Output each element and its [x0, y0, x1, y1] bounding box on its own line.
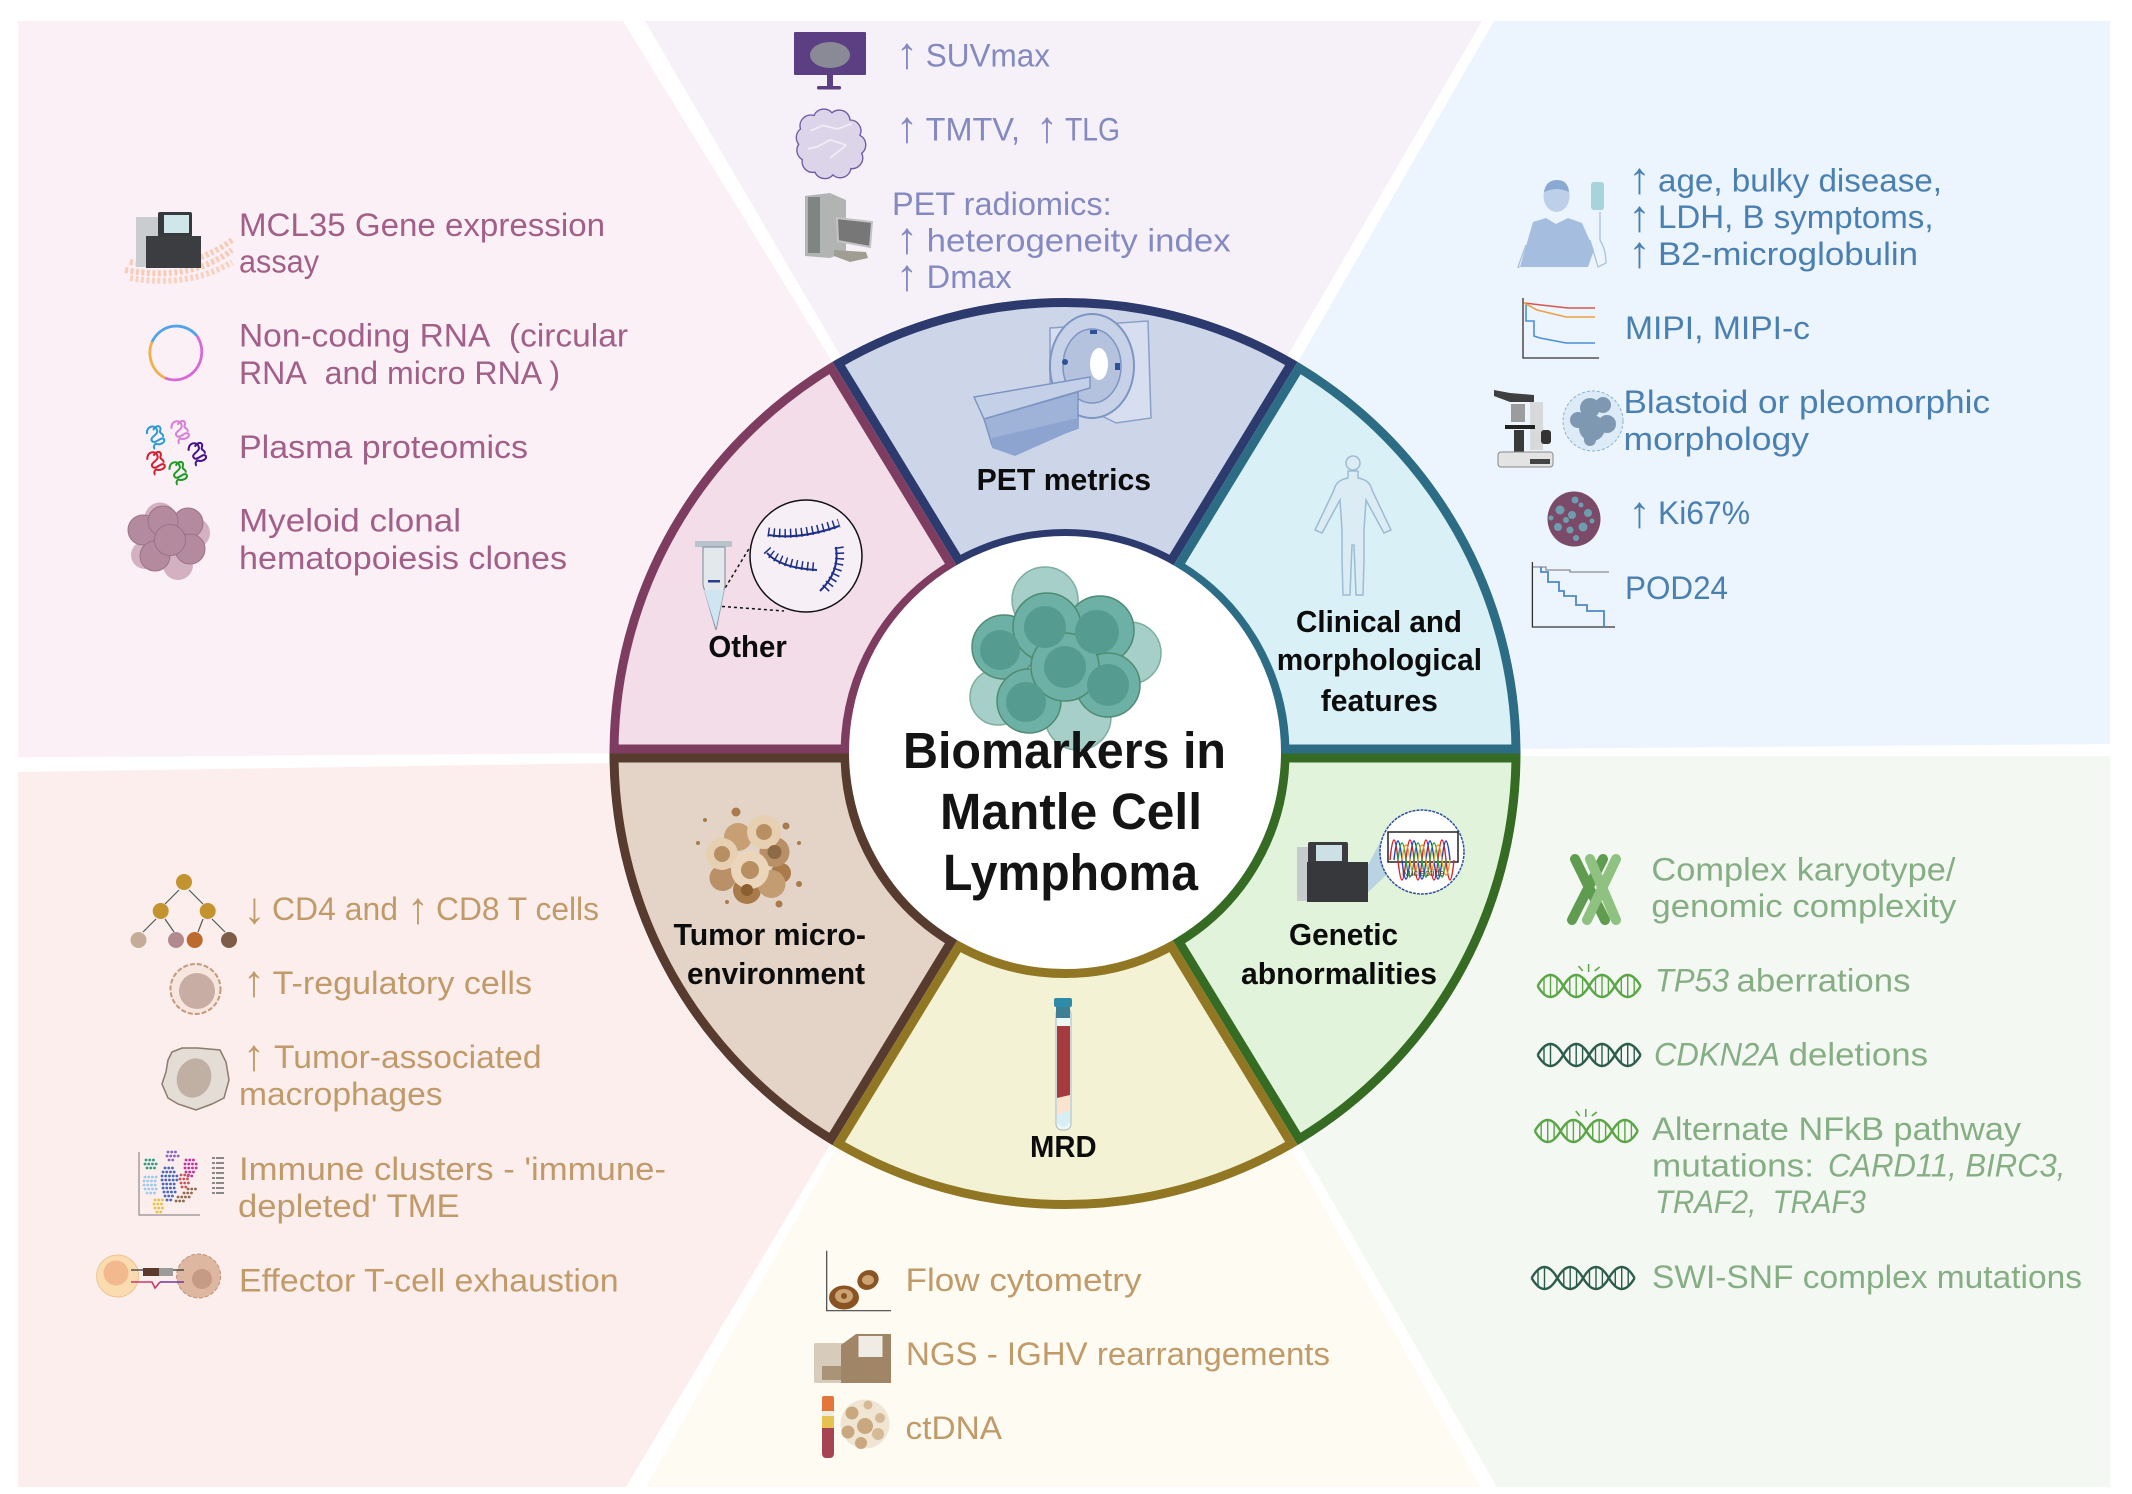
label: Clinical and morphological features: features	[1321, 683, 1438, 718]
text: CD4 and CD8 T cells: CD4 and	[272, 891, 398, 927]
text: CDKN2A deletions: deletions	[1789, 1037, 1928, 1073]
icon: human body	[1315, 456, 1391, 595]
icon: chromosomes	[1572, 859, 1616, 920]
panel: MRD list	[814, 1251, 1330, 1458]
text: complex karyotype: genomic complexity	[1651, 888, 1956, 924]
text: CDKN2A deletions	[1654, 1037, 1928, 1073]
text: complex karyotype	[1651, 852, 1956, 924]
text: NFkB pathway mutations: CARD11, BIRC3,	[1828, 1148, 2065, 1184]
text: ctDNA: ctDNA	[906, 1410, 1003, 1446]
text: Non-coding RNA: Non-coding RNA (circular	[239, 318, 628, 354]
wheel sector: other	[614, 368, 951, 749]
text: SUVmax	[896, 29, 1050, 78]
text: TMTV, TLG: TLG	[1065, 112, 1120, 148]
text: tumor-associated macrophages: macrophages	[239, 1076, 443, 1112]
icon: gene expression sequencer	[125, 212, 232, 281]
text: CD4 and CD8 T cells: CD8 T cells	[436, 891, 599, 927]
text: patient factors: ↑	[1628, 192, 1650, 241]
text: patient factors: LDH, B symptoms,	[1658, 199, 1934, 235]
text: PET radiomics: heterogeneity index	[927, 223, 1231, 259]
icon: monitor with scan	[794, 32, 866, 90]
text: CD4 and CD8 T cells	[244, 884, 599, 933]
icon: survival plot MIPI	[1523, 298, 1599, 358]
title: Lymphoma	[943, 844, 1199, 901]
text: POD24: POD24	[1625, 570, 1728, 606]
panel background: PET metrics (lavender)	[645, 21, 1482, 745]
text: Plasma proteomics: Plasma proteomics	[239, 429, 528, 465]
text: SWI-SNF complex mutations: SWI-SNF complex mutations	[1652, 1259, 2082, 1295]
label: Clinical and morphological features: Clinical and	[1296, 604, 1462, 639]
icon: microscope with cell inset	[1494, 390, 1623, 467]
text: TMTV, TLG: ↑	[1036, 103, 1058, 152]
text: T-regulatory cells	[243, 957, 532, 1006]
wheel sector: MRD	[839, 946, 1291, 1204]
icon: patient with IV drip	[1518, 180, 1606, 267]
text: Flow cytometry: Flow cytometry	[906, 1262, 1142, 1298]
label: Clinical and morphological features	[1277, 604, 1482, 718]
text: patient factors	[1628, 154, 1942, 277]
icon: survival plot POD24	[1532, 562, 1615, 627]
icon: NGS sequencer	[814, 1334, 891, 1383]
text: immune clusters: depleted' TME	[238, 1188, 460, 1224]
icon: effector T-cell exhaustion	[97, 1254, 221, 1298]
text: CDKN2A deletions: CDKN2A	[1654, 1037, 1780, 1073]
label: Genetic abnormalities	[1241, 917, 1437, 991]
text: TMTV, TLG: ↑	[896, 103, 918, 152]
panel: genetic list	[1532, 852, 2082, 1295]
label: MRD: MRD	[1030, 1129, 1097, 1164]
text: Ki67: Ki67%	[1658, 495, 1750, 531]
icon: flow cytometry plot	[827, 1251, 891, 1311]
panel background: tumor microenvironment (rose)	[18, 758, 1060, 1487]
text: Non-coding RNA	[239, 318, 628, 391]
icon: tumor mass	[796, 109, 866, 179]
text: NGS: NGS - IGHV rearrangements	[906, 1336, 1330, 1372]
wheel sector: clinical and morphological features	[1179, 368, 1516, 749]
icon: myeloid cell cluster	[128, 502, 210, 580]
text: SUVmax: ↑	[896, 29, 918, 78]
icon: DNA SWI-SNF	[1532, 1267, 1635, 1289]
text: PET radiomics	[892, 186, 1231, 300]
text: PET radiomics: PET radiomics:	[892, 186, 1112, 222]
text: PET radiomics: ↑	[896, 251, 918, 300]
text: Myeloid clonal hematopoiesis clones	[239, 503, 567, 576]
text: MIPI: MIPI, MIPI-c	[1625, 310, 1810, 346]
icon: tumor cell cluster	[696, 808, 802, 908]
text: patient factors: age, bulky disease,	[1658, 163, 1942, 199]
text: patient factors: B2-microglobulin	[1658, 236, 1918, 272]
icon: immune cluster scatter plot	[139, 1152, 224, 1215]
text: immune clusters	[238, 1151, 666, 1224]
text: effector T-cell exhaustion: Effector T-cell exhaustion	[239, 1263, 619, 1299]
icon: sequencer with chromatogram: Nucleotide	[1402, 868, 1445, 878]
text: TMTV, TLG	[896, 103, 1120, 152]
text: SUVmax: SUVmax	[926, 38, 1050, 74]
text: Ki67: ↑	[1628, 488, 1650, 537]
icon: blood tube and ctDNA cells	[822, 1396, 890, 1458]
panel background: MRD (cream)	[646, 760, 1481, 1487]
icon: sequencer with chromatogram	[1297, 810, 1464, 902]
text: CD4 and CD8 T cells: ↓	[244, 884, 266, 933]
icon: mantle cell cluster	[970, 567, 1161, 750]
icon: mutated DNA NFkB	[1535, 1109, 1638, 1142]
text: complex karyotype: Complex karyotype/	[1651, 852, 1956, 888]
text: NFkB pathway mutations: TRAF2, TRAF3	[1655, 1184, 1866, 1220]
text: PET radiomics: Dmax	[927, 259, 1012, 295]
text: Myeloid clonal hematopoiesis clones: Myeloid clonal	[239, 503, 461, 539]
label: Tumor micro-environment: environment	[687, 956, 865, 991]
text: PET radiomics: ↑	[896, 214, 918, 263]
icon: microtube with RNA strands	[695, 500, 862, 630]
text: morphology: Blastoid or pleomorphic	[1624, 384, 1990, 420]
wheel backing disc	[609, 298, 1521, 1210]
label: Genetic abnormalities: abnormalities	[1241, 956, 1437, 991]
icon: mutated DNA TP53	[1538, 964, 1641, 997]
label: Tumor micro-environment	[674, 917, 866, 991]
text: TP53 aberrations: aberrations	[1736, 963, 1910, 999]
label: Genetic abnormalities: Genetic	[1289, 917, 1398, 952]
label: PET metrics: PET metrics	[977, 462, 1151, 497]
icon: plasma proteins	[147, 421, 206, 485]
text: MCL35 Gene expression assay: MCL35 Gene expression	[239, 207, 605, 243]
wheel sector: tumor microenvironment	[614, 758, 951, 1139]
text: TMTV, TLG: TMTV,	[926, 112, 1020, 148]
panel: clinical list	[1494, 154, 1990, 627]
text: morphology: morphology	[1624, 421, 1809, 457]
label: Other: Other	[708, 629, 787, 664]
icon: T-regulatory cell	[170, 964, 220, 1014]
text: NFkB pathway mutations: mutations:	[1652, 1148, 1814, 1184]
panel background: other (pink)	[18, 21, 1060, 758]
text: MCL35 Gene expression assay: assay	[239, 244, 319, 280]
icon: macrophage	[162, 1048, 229, 1110]
text: tumor-associated macrophages: ↑	[243, 1031, 265, 1080]
text: patient factors: ↑	[1628, 154, 1650, 203]
text: NFkB pathway mutations: Alternate NFkB pathway	[1652, 1111, 2021, 1147]
title	[903, 722, 1226, 901]
text: Ki67	[1628, 488, 1750, 537]
panel background: clinical (blue)	[1070, 21, 2110, 749]
text: TP53 aberrations: TP53	[1655, 963, 1729, 999]
text: Myeloid clonal hematopoiesis clones: hematopoiesis clones	[239, 540, 567, 576]
icon: PET scanner	[974, 314, 1151, 456]
text: immune clusters: Immune clusters - 'immune-	[239, 1151, 666, 1187]
text: T-regulatory cells: T-regulatory cells	[273, 965, 532, 1001]
wheel sector: PET metrics	[839, 303, 1291, 561]
title: Mantle Cell	[940, 783, 1202, 840]
text: NFkB pathway mutations	[1652, 1111, 2065, 1220]
text: MCL35 Gene expression assay	[239, 207, 605, 280]
panel background: genetic (green)	[1070, 756, 2110, 1487]
text: tumor-associated macrophages: Tumor-associated	[274, 1039, 542, 1075]
label: Clinical and morphological features: morphological	[1277, 642, 1482, 677]
icon: blood tube	[1054, 998, 1072, 1130]
panel: Other biomarkers list	[125, 207, 628, 580]
text: morphology	[1624, 384, 1990, 457]
text: CD4 and CD8 T cells: ↑	[407, 884, 429, 933]
icon: server and computer	[805, 193, 872, 262]
text: tumor-associated macrophages	[239, 1031, 542, 1112]
icon: T cell differentiation tree	[130, 874, 237, 948]
wheel sector: genetic abnormalities	[1179, 758, 1516, 1139]
icon: circular RNA	[150, 326, 202, 380]
text: patient factors: ↑	[1628, 228, 1650, 277]
title: Biomarkers in	[903, 722, 1226, 779]
text: T-regulatory cells: ↑	[243, 957, 265, 1006]
icon: Ki67 stained tissue	[1548, 492, 1600, 546]
text: Non-coding RNA: RNA and micro RNA )	[239, 355, 560, 391]
label: Tumor micro-environment: Tumor micro-	[674, 917, 866, 952]
icon: deleted DNA CDKN2A	[1538, 1044, 1641, 1066]
center circle	[849, 536, 1281, 968]
text: TP53 aberrations	[1655, 963, 1910, 999]
panel: tumor microenvironment list	[97, 874, 666, 1299]
panel: PET metrics list	[794, 29, 1231, 300]
